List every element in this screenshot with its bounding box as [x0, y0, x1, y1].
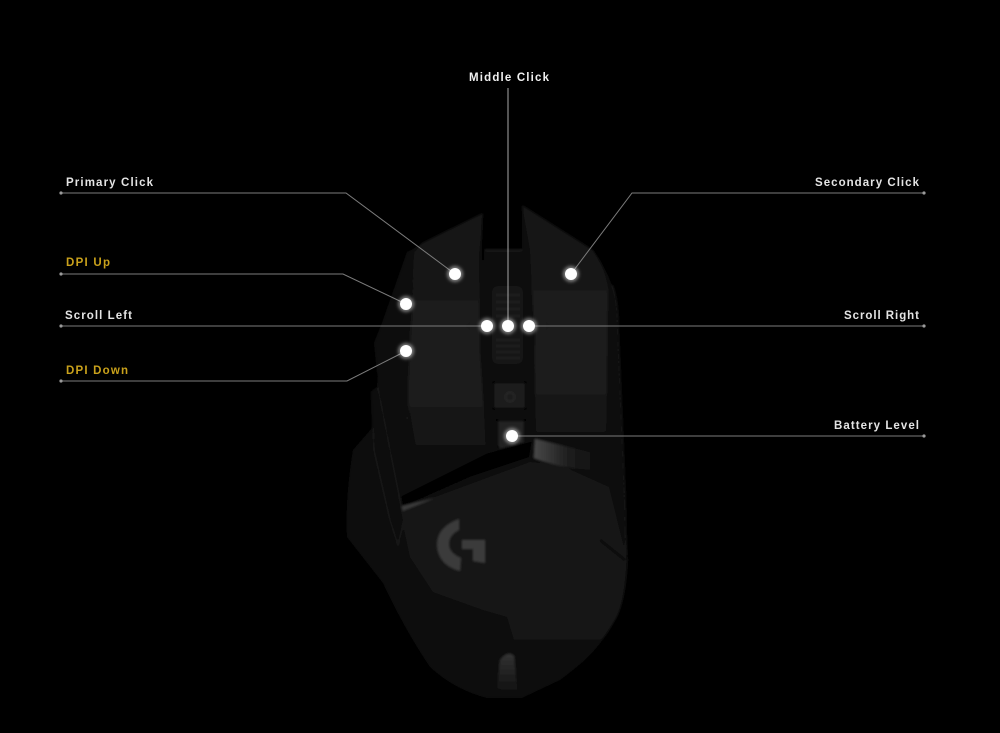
marker dots [398, 266, 579, 444]
right edge [612, 285, 626, 555]
callout: Battery Level: Battery Level [834, 420, 919, 432]
palm ridge [600, 540, 625, 560]
side buttons [372, 388, 404, 545]
callout: Secondary Click: Secondary Click [815, 177, 920, 189]
callout: DPI Down [59, 351, 406, 383]
callout: DPI Down: DPI Down [66, 365, 128, 377]
callout: Primary Click [59, 177, 455, 274]
channel top edge [485, 249, 522, 251]
Logitech G logo [437, 519, 485, 571]
callout: Scroll Left: Scroll Left [65, 310, 132, 322]
palm rest [395, 455, 635, 705]
callout: Middle Click: Middle Click [469, 72, 550, 84]
mouse illustration [347, 205, 635, 705]
callout: DPI Up [59, 257, 406, 304]
mode button icon [506, 392, 514, 402]
callout: Scroll Right: Scroll Right [844, 310, 919, 322]
callout: Battery Level [512, 420, 926, 438]
callout: Scroll Left [59, 310, 487, 328]
scroll wheel [491, 285, 524, 365]
mode button [493, 382, 526, 409]
left lower grip [347, 427, 522, 698]
glossy accent bar left [400, 440, 533, 508]
gloss streak [400, 498, 435, 512]
infographic: mouse button map [59, 72, 926, 698]
callout: Scroll Right [529, 310, 926, 328]
scroll arrow left [465, 322, 470, 330]
left click button [408, 213, 488, 472]
callout: DPI Up: DPI Up [66, 257, 110, 269]
wheel ridges [496, 295, 520, 358]
scroll channel [481, 250, 535, 470]
right click button [522, 205, 608, 458]
rear notch [497, 654, 518, 696]
callout: Secondary Click [571, 177, 926, 274]
callout: Primary Click: Primary Click [66, 177, 154, 189]
mouse body [347, 205, 628, 698]
left side panel [375, 252, 415, 420]
scroll arrow right [546, 322, 551, 330]
glossy accent bar right [534, 439, 606, 470]
battery button [497, 420, 525, 456]
